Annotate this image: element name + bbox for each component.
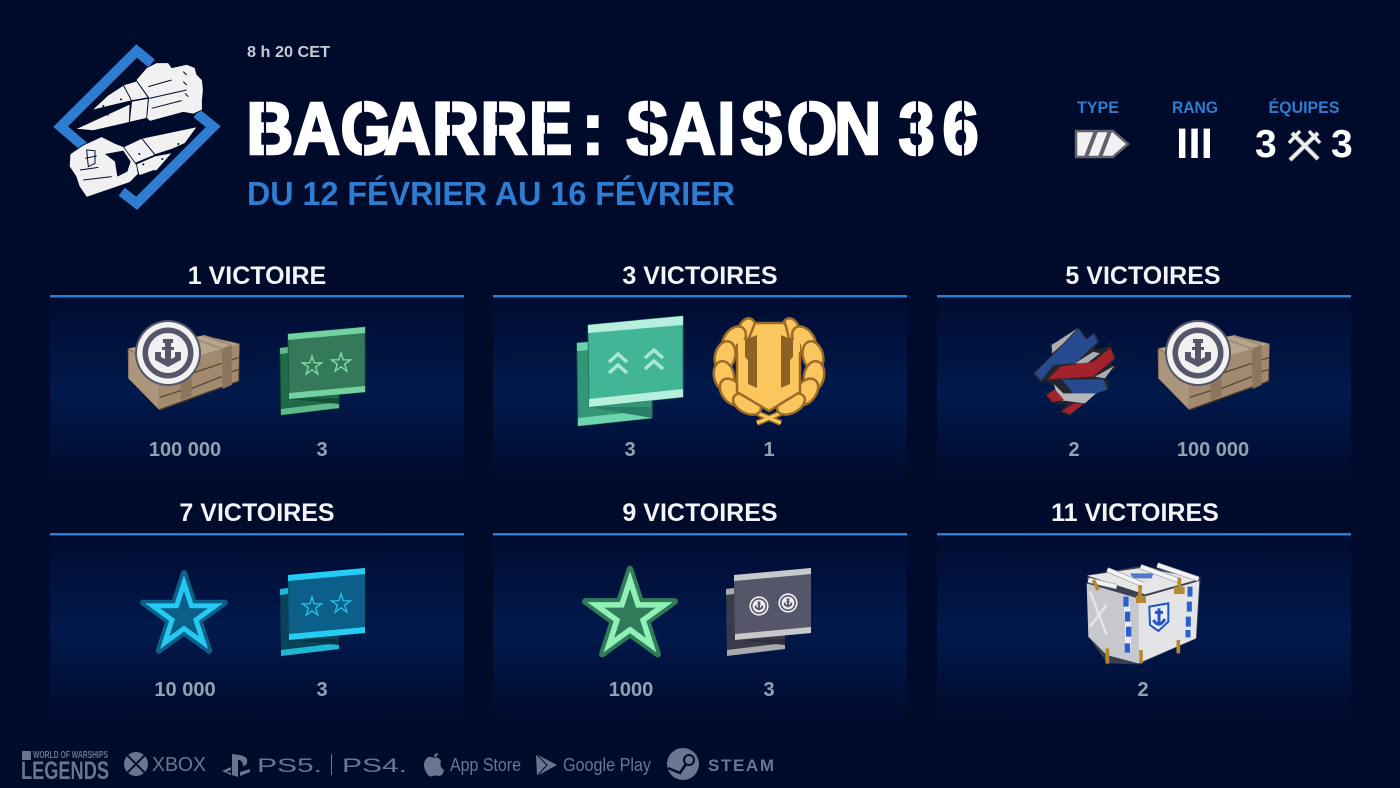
- value: 1000: 1000: [609, 679, 653, 701]
- value: 2: 2: [1068, 439, 1080, 461]
- logo: world of warships legends: [21, 750, 109, 785]
- icon: grey anchors flag: [726, 568, 811, 656]
- value: 3: 3: [763, 679, 775, 701]
- info: rang: RANG: [1172, 98, 1218, 117]
- logo: xbox: [124, 752, 206, 776]
- logo: world of warships legends: LEGENDS: [21, 757, 109, 785]
- icon: crate with coin badge: [127, 320, 240, 411]
- icon: green stars flag: [280, 327, 365, 415]
- info: rang: [1172, 98, 1218, 168]
- heading: 7 victoires: 7 VICTOIRES: [179, 499, 335, 527]
- panel: 9 victoires: [493, 499, 907, 726]
- value: 100 000: 100 000: [1177, 439, 1249, 461]
- logo: app store: App Store: [450, 755, 521, 775]
- logo: steam: STEAM: [708, 756, 774, 775]
- panel: 1 victoire: [50, 262, 464, 487]
- logo: playstation 5 and 4: [222, 754, 407, 777]
- logo: app store: [424, 753, 521, 776]
- logo: crossed gauntlets in diamond: [61, 51, 213, 203]
- icon: green star: [585, 569, 675, 654]
- subtitle: dates: DU 12 FÉVRIER AU 16 FÉVRIER: [247, 175, 735, 212]
- icon: blue star: [143, 573, 225, 651]
- icon: blue stars flag: [280, 568, 365, 656]
- value: 2: 2: [1137, 679, 1149, 701]
- value: 100 000: 100 000: [149, 439, 221, 461]
- info: equipes: 3: [1331, 123, 1353, 166]
- icon: teal chevrons flag: [577, 316, 683, 426]
- panel: 7 victoires: [50, 499, 464, 726]
- logo: playstation 5 and 4: PS5.: [257, 756, 322, 777]
- info: equipes: 3: [1255, 123, 1277, 166]
- heading: 3 victoires: 3 VICTOIRES: [622, 262, 778, 290]
- panel: 11 victoires: [937, 499, 1351, 726]
- info: rang: III: [1176, 120, 1213, 168]
- value: 1: 1: [763, 439, 775, 461]
- logo: world of warships legends: WORLD OF WARSHIPS: [33, 750, 108, 761]
- panel: 5 victoires: [937, 262, 1351, 487]
- logo: steam: [667, 748, 774, 780]
- footer: platform logos: [21, 748, 774, 785]
- logo: google play: Google Play: [563, 755, 651, 775]
- value: 3: 3: [316, 679, 328, 701]
- heading: 1 victoire: 1 VICTOIRE: [188, 262, 326, 290]
- value: 3: 3: [316, 439, 328, 461]
- icon: white blue chest: [1087, 565, 1201, 664]
- heading: 11 victoires: 11 VICTOIRES: [1051, 499, 1219, 527]
- title: BAGARRE : SAISON 36: [246, 87, 979, 170]
- info: equipes: ÉQUIPES: [1268, 98, 1340, 117]
- heading: 5 victoires: 5 VICTOIRES: [1065, 262, 1221, 290]
- value: 3: 3: [624, 439, 636, 461]
- logo: xbox: XBOX: [152, 754, 206, 776]
- logo: playstation 5 and 4: PS4.: [342, 756, 407, 777]
- info: type: [1076, 98, 1128, 157]
- icon: gold laurel medal: [711, 316, 827, 423]
- info: equipes: [1255, 98, 1353, 166]
- info: type: TYPE: [1077, 98, 1119, 117]
- logo: google play: [536, 754, 651, 776]
- panel: 3 victoires: [493, 262, 907, 487]
- value: 10 000: 10 000: [154, 679, 216, 701]
- time: 8 h 20 CET: [247, 44, 330, 61]
- heading: 9 victoires: 9 VICTOIRES: [622, 499, 778, 527]
- icon: crate with coin badge: [1157, 320, 1270, 411]
- icon: blue white red emblem: [1033, 327, 1117, 416]
